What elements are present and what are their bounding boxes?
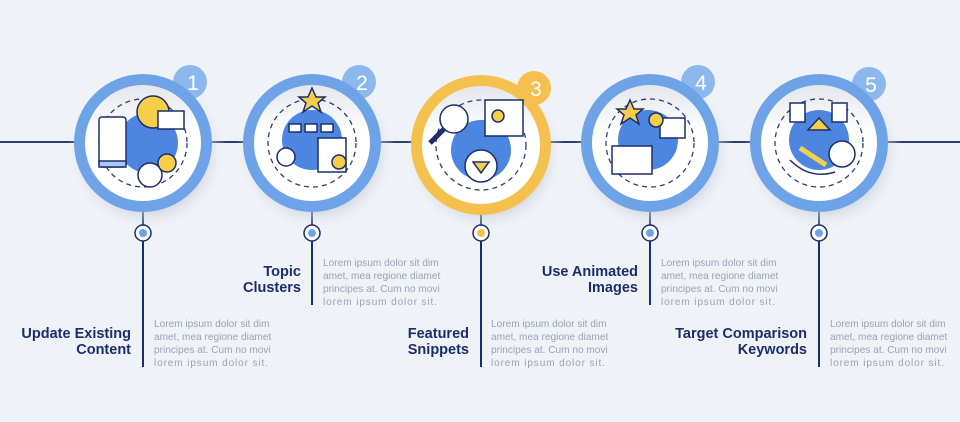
body 1: principes at. Cum no movi <box>154 345 271 356</box>
dot 5 <box>811 225 827 241</box>
dot 1 <box>135 225 151 241</box>
timeline line <box>0 141 960 143</box>
body 5: Lorem ipsum dolor sit dim <box>830 319 946 330</box>
body 4: lorem ipsum dolor sit. <box>661 297 775 308</box>
body 4: Lorem ipsum dolor sit dim <box>661 258 777 269</box>
badge 3: 3 <box>530 78 542 101</box>
title 1: Content <box>76 342 131 358</box>
title 1: Update Existing <box>21 326 131 342</box>
title 4: Use Animated <box>542 264 638 280</box>
body 2: amet, mea regione diamet <box>323 271 440 282</box>
badge 5 <box>852 67 886 101</box>
body 5: principes at. Cum no movi <box>830 345 947 356</box>
step 2 <box>236 65 396 305</box>
circle 4 <box>581 74 719 212</box>
body 3: Lorem ipsum dolor sit dim <box>491 319 607 330</box>
step 5 <box>743 67 903 367</box>
step 4 <box>574 65 734 305</box>
title 5: Target Comparison <box>675 326 807 342</box>
step 3 <box>405 71 565 367</box>
title 5: Keywords <box>738 342 807 358</box>
dot 2 <box>304 225 320 241</box>
body 4: amet, mea regione diamet <box>661 271 778 282</box>
icon: scale key hashtag <box>790 103 855 174</box>
title 3: Snippets <box>408 342 469 358</box>
body 3: principes at. Cum no movi <box>491 345 608 356</box>
body 3: lorem ipsum dolor sit. <box>491 358 605 369</box>
icon: magnifier bulb diamond <box>430 100 523 182</box>
badge 1 <box>173 65 207 99</box>
body 4: principes at. Cum no movi <box>661 284 778 295</box>
title 3: Featured <box>408 326 469 342</box>
body 2: principes at. Cum no movi <box>323 284 440 295</box>
badge 4: 4 <box>695 72 707 95</box>
body 3: amet, mea regione diamet <box>491 332 608 343</box>
badge 1: 1 <box>187 72 199 95</box>
badge 4 <box>681 65 715 99</box>
dot 4 <box>642 225 658 241</box>
badge 5: 5 <box>865 74 877 97</box>
body 5: amet, mea regione diamet <box>830 332 947 343</box>
circle 1 <box>74 74 212 212</box>
circle 3 <box>411 75 551 215</box>
icon: hand star monitor <box>612 100 685 174</box>
title 4: Images <box>588 280 638 296</box>
circle 5 <box>750 74 888 212</box>
badge 2: 2 <box>356 72 368 95</box>
body 1: Lorem ipsum dolor sit dim <box>154 319 270 330</box>
icon: hierarchy <box>277 88 346 172</box>
body 1: lorem ipsum dolor sit. <box>154 358 268 369</box>
dot 3 <box>473 225 489 241</box>
body 2: Lorem ipsum dolor sit dim <box>323 258 439 269</box>
title 2: Clusters <box>243 280 301 296</box>
title 2: Topic <box>263 264 301 280</box>
badge 3 <box>517 71 551 105</box>
body 2: lorem ipsum dolor sit. <box>323 297 437 308</box>
body 1: amet, mea regione diamet <box>154 332 271 343</box>
step 1 <box>67 65 227 367</box>
badge 2 <box>342 65 376 99</box>
circle 2 <box>243 74 381 212</box>
body 5: lorem ipsum dolor sit. <box>830 358 944 369</box>
icon: phone clock gears <box>99 96 184 187</box>
